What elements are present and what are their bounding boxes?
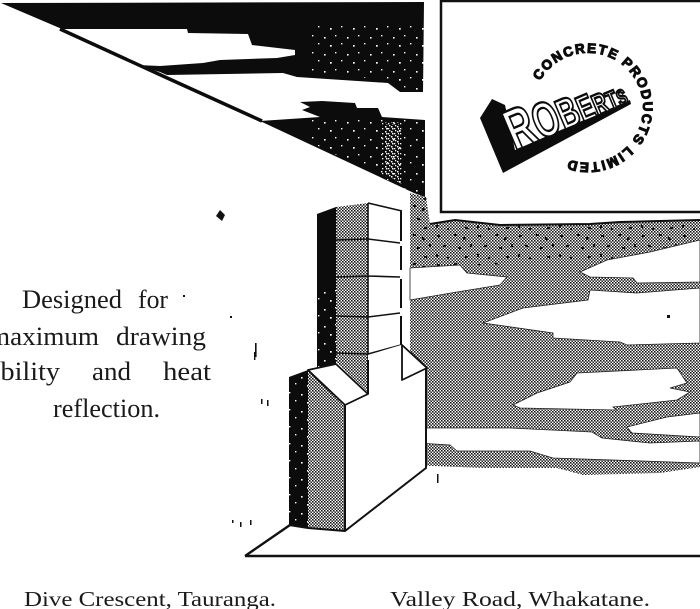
base halftone side: [308, 370, 345, 531]
caption: design note: heat: [163, 357, 212, 386]
tower white side: [368, 203, 402, 355]
floor line: [245, 525, 700, 556]
white cloud: horizon band: [418, 428, 700, 463]
logo panel: [440, 0, 700, 214]
base roof: [308, 364, 368, 405]
sky speckle: [310, 22, 424, 90]
caption: design note: reflection.: [53, 394, 160, 423]
white ground below strip: [410, 465, 700, 482]
logo block side and shadow: [480, 99, 631, 173]
print specks: [183, 210, 670, 527]
dark sky, lower wedge: [260, 101, 425, 197]
base outline: [289, 360, 426, 531]
tower halftone side: [336, 203, 368, 392]
notch: [402, 345, 427, 380]
base white front: [345, 345, 427, 531]
tower black side: [317, 207, 336, 372]
white cloud: right wedge: [627, 413, 700, 437]
base black side: [289, 370, 308, 528]
white cloud: upper right: [580, 240, 700, 283]
caption: design note: Designed: [22, 285, 122, 314]
wedge speckle: [310, 118, 425, 196]
caption: design note: and: [92, 357, 131, 386]
tower right edge: [400, 211, 402, 345]
lighter speckled band: [382, 122, 402, 184]
caption: design note: [0, 285, 212, 423]
diagonal roof line: [60, 29, 262, 121]
tower block joints: [336, 203, 402, 392]
building: [289, 203, 427, 531]
halftone clouded sky, right of building: [410, 193, 700, 476]
caption: design note: for: [138, 285, 168, 314]
logo arc text: CONCRETE PRODUCTS LIMITED: [533, 42, 654, 173]
caption: design note: drawing: [116, 322, 206, 351]
dark sky, upper band: [1, 2, 424, 92]
white cloud: middle right: [483, 288, 700, 345]
white cloud: lower right: [513, 368, 690, 410]
logo wordmark: ROBERTS: [495, 56, 634, 163]
white cloud: left: [410, 265, 507, 300]
